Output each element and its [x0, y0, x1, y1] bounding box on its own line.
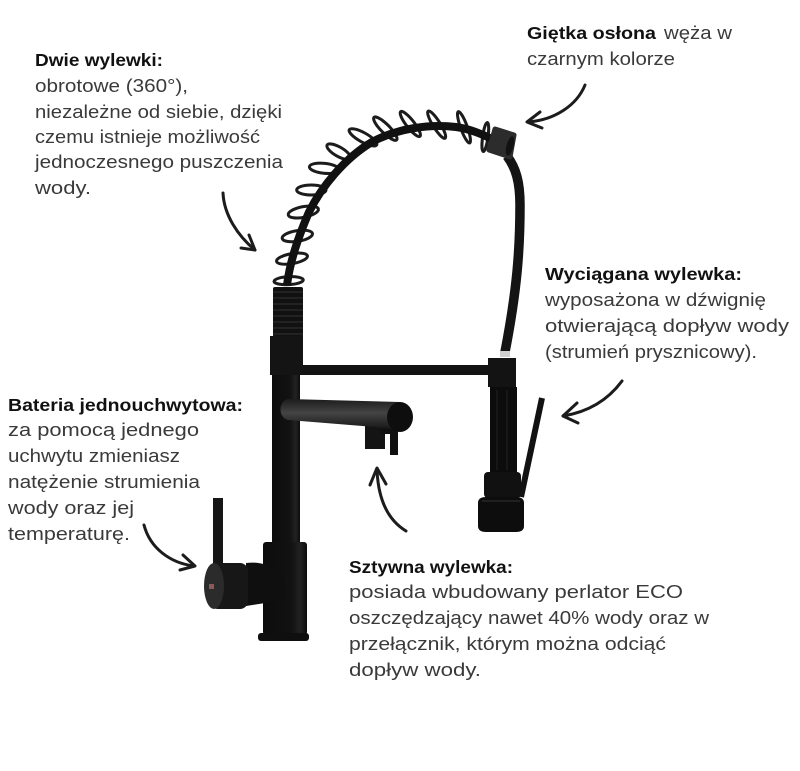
- annotation: two spouts: [34, 50, 284, 198]
- body text: dopływ wody.: [349, 659, 481, 680]
- arrow: two spouts: [223, 193, 255, 250]
- hose nut: [489, 129, 516, 157]
- body text: otwierającą dopływ wody: [545, 315, 790, 336]
- collar: [270, 336, 303, 375]
- main column: [272, 373, 300, 545]
- rigid spout: [280, 399, 413, 455]
- body text: (strumień prysznicowy).: [545, 341, 757, 362]
- spray lever: [521, 398, 542, 497]
- heading: Dwie wylewki:: [35, 50, 163, 70]
- body text: jednoczesnego puszczenia: [34, 151, 284, 172]
- arrow: pull-out spout: [563, 381, 622, 423]
- pull-out spray head: [478, 358, 542, 532]
- heading: Sztywna wylewka:: [349, 557, 513, 577]
- body text: temperaturę.: [8, 523, 130, 544]
- faucet base: [258, 542, 309, 641]
- body text: [7, 419, 201, 544]
- heading: Bateria jednouchwytowa:: [8, 395, 243, 415]
- arrow: hose cover: [527, 85, 585, 128]
- annotation: flexible hose cover: [527, 22, 733, 69]
- body text: obrotowe (360°),: [35, 75, 188, 96]
- body text: natężenie strumienia: [8, 471, 201, 492]
- annotation: rigid spout: [349, 557, 710, 680]
- body text: [544, 289, 790, 362]
- flexible hose: [505, 156, 520, 352]
- ribbed sleeve: [273, 287, 303, 337]
- side handle: [204, 498, 285, 609]
- connecting bar: [303, 365, 489, 375]
- arrow: single-lever mixer: [144, 525, 195, 570]
- spring core arc: [287, 126, 496, 285]
- body text: czarnym kolorze: [527, 48, 675, 69]
- body text: wody.: [34, 177, 91, 198]
- body text: czemu istnieje możliwość: [35, 126, 260, 147]
- annotation: single-lever mixer: [7, 395, 243, 544]
- heading: Giętka osłona: [527, 23, 656, 43]
- spring coils: [274, 109, 490, 285]
- body text: oszczędzający nawet 40% wody oraz w: [349, 607, 710, 628]
- body text: [349, 581, 710, 680]
- faucet illustration: [204, 109, 542, 641]
- hose ring: [500, 351, 510, 357]
- body text: przełącznik, którym można odciąć: [349, 633, 666, 654]
- body text: [34, 75, 284, 198]
- body text: wyposażona w dźwignię: [544, 289, 766, 310]
- body text: uchwytu zmieniasz: [8, 445, 180, 466]
- body text: [527, 22, 733, 69]
- body text: węża w: [663, 22, 733, 43]
- body text: posiada wbudowany perlator ECO: [349, 581, 683, 602]
- arrow: rigid spout: [370, 468, 406, 531]
- annotation: pull-out spout: [544, 264, 790, 362]
- body text: wody oraz jej: [7, 497, 134, 518]
- heading: Wyciągana wylewka:: [545, 264, 742, 284]
- body text: za pomocą jednego: [8, 419, 199, 440]
- body text: niezależne od siebie, dzięki: [35, 101, 282, 122]
